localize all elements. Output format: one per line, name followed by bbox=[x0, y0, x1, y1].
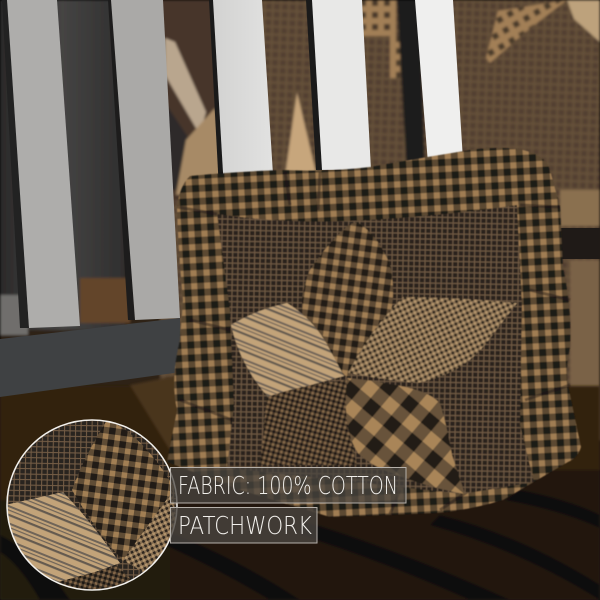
petal: tan check bbox=[348, 297, 517, 383]
petal: gingham bbox=[302, 222, 393, 378]
chair slats bbox=[2, 0, 464, 328]
slat 5 bbox=[415, 0, 464, 176]
label: fabric: FABRIC: 100% COTTON bbox=[178, 471, 398, 500]
detail: tan check petal bbox=[123, 492, 180, 572]
plaid body bbox=[217, 205, 534, 494]
slat 1 bbox=[2, 0, 80, 328]
pillow bbox=[167, 148, 581, 517]
label: patchwork: PATCHWORK bbox=[178, 511, 313, 540]
chair rail left bbox=[0, 318, 181, 397]
petal: big check bbox=[346, 378, 465, 494]
slat 2 bbox=[108, 0, 180, 320]
petal: dark check bbox=[260, 380, 357, 465]
slat 3 bbox=[209, 0, 274, 190]
petal: stripe bbox=[231, 303, 344, 397]
slat 4 bbox=[306, 0, 371, 170]
detail: stripe petal bbox=[5, 492, 120, 585]
detail: gingham petal bbox=[72, 420, 174, 561]
floor and chair seat bbox=[0, 375, 600, 600]
label: fabric bbox=[170, 468, 406, 503]
zoom circle: fabric detail bbox=[0, 415, 180, 595]
circle outline bbox=[7, 420, 177, 590]
ruffle bbox=[167, 148, 581, 517]
ruffle fold shading bbox=[177, 172, 570, 514]
chair rail right bbox=[556, 228, 600, 259]
detail: dark check petal bbox=[58, 566, 131, 590]
